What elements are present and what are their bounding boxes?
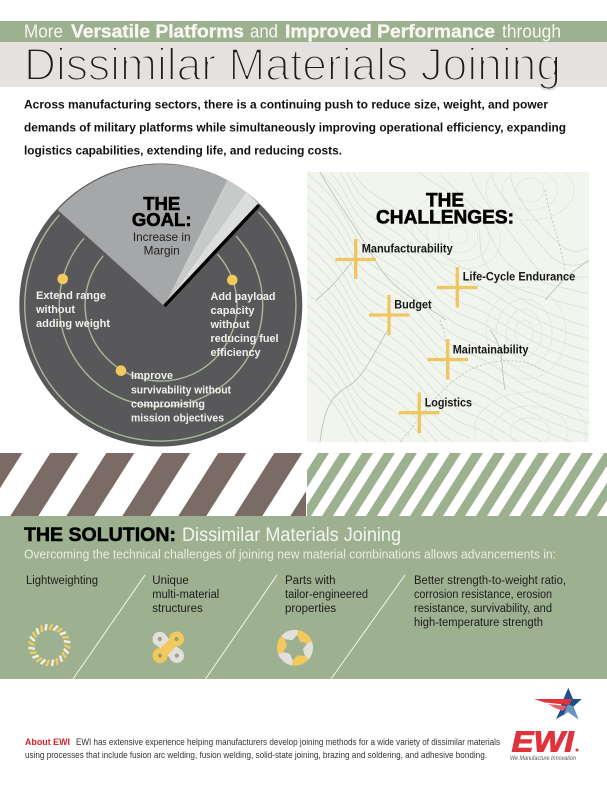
heading: kicker line: More — [24, 20, 63, 42]
solution heading: THE SOLUTION: — [24, 525, 176, 546]
icon: circular arrows — [277, 630, 313, 666]
goal heading: THE — [143, 193, 180, 214]
label: add payload: efficiency — [210, 347, 261, 359]
challenges heading — [376, 191, 514, 228]
rings — [25, 212, 296, 441]
logo: EWI — [510, 688, 582, 762]
about EWI text: using processes that include fusion arc welding, fusion welding, solid-state joining, brazing and soldering, and adhesive bonding. — [25, 750, 487, 760]
column: better strength: high-temperature strength — [414, 617, 543, 629]
label: add payload: reducing fuel — [210, 333, 278, 345]
topographic contours — [307, 172, 589, 442]
trails on map — [316, 172, 589, 442]
label: improve survivability: mission objectives — [131, 412, 224, 424]
diagonal separators — [73, 575, 405, 679]
intro paragraph: demands of military platforms while simultaneously improving operational efficiency, expanding — [24, 120, 566, 134]
challenge labels: Logistics — [425, 397, 472, 409]
green stripes — [307, 453, 607, 516]
column: multi-material structures: Unique — [152, 575, 189, 587]
challenge labels — [362, 244, 575, 409]
label: add payload: capacity — [210, 305, 255, 317]
goal heading: Increase in — [133, 230, 191, 244]
divider line — [164, 205, 259, 306]
label: add payload: without — [210, 319, 250, 331]
about EWI text — [25, 737, 500, 760]
column: better strength — [414, 575, 566, 629]
intro paragraph — [24, 98, 566, 158]
panel: the solution — [0, 516, 607, 679]
pie wedge: margin — [58, 164, 227, 306]
label: add payload: Add payload — [210, 291, 276, 303]
panel: the goal pie chart — [19, 164, 302, 446]
challenge labels: Manufacturability — [362, 244, 453, 256]
contour peaks — [412, 172, 586, 442]
label: extend range: Extend range — [36, 290, 106, 302]
column: better strength: corrosion resistance, erosion — [414, 589, 552, 601]
label: extend range: adding weight — [36, 318, 110, 330]
panel: the challenges topographic map — [307, 172, 589, 442]
brown stripes — [0, 453, 306, 516]
label: improve survivability: survivability without — [131, 384, 231, 396]
challenge labels: Budget — [394, 300, 432, 312]
dots — [57, 274, 238, 376]
goal heading: Margin — [144, 244, 180, 258]
column: lightweighting: Lightweighting — [26, 575, 98, 587]
label: extend range — [35, 290, 110, 330]
heading: kicker line: through — [502, 20, 561, 42]
column: tailor-engineered properties — [285, 575, 368, 615]
challenges heading: THE — [426, 191, 464, 212]
goal heading: GOAL: — [132, 209, 192, 230]
column: better strength: resistance, survivability, and — [414, 603, 552, 615]
icon: chain links — [152, 632, 184, 663]
label: add payload — [210, 291, 278, 359]
challenge labels: Maintainability — [453, 344, 529, 356]
column: multi-material structures: structures — [152, 603, 203, 615]
heading: kicker line — [24, 20, 561, 42]
column: tailor-engineered properties: Parts with — [285, 575, 336, 587]
column: multi-material structures — [152, 575, 219, 615]
column: multi-material structures: multi-material — [152, 589, 219, 601]
column: tailor-engineered properties: tailor-engineered — [285, 589, 368, 601]
pie wedge: light slice — [164, 180, 246, 306]
about EWI text: EWI has extensive experience helping manufacturers develop joining methods for a wide variety of dissimilar materials — [76, 737, 500, 747]
label: improve survivability — [131, 370, 231, 424]
heading: kicker line: Improved Performance — [285, 20, 495, 42]
label: improve survivability: Improve — [131, 370, 173, 382]
challenges heading: CHALLENGES: — [376, 207, 514, 228]
markers and labels — [336, 239, 478, 433]
column: tailor-engineered properties: properties — [285, 603, 336, 615]
icon: twisted ring — [28, 624, 70, 666]
intro paragraph: Across manufacturing sectors, there is a continuing push to reduce size, weight, and power — [24, 98, 548, 112]
label: extend range: without — [35, 304, 75, 316]
column: better strength: Better strength-to-weight ratio, — [414, 575, 566, 587]
header band — [0, 20, 607, 42]
solution heading: Dissimilar Materials Joining — [182, 525, 401, 546]
challenge labels: Life-Cycle Endurance — [463, 272, 575, 284]
logo star — [534, 688, 582, 719]
heading: kicker line: Versatile Platforms — [71, 20, 244, 42]
label: improve survivability: compromising — [131, 398, 205, 410]
logo wordmark: EWI — [512, 727, 575, 759]
heading: kicker line: and — [250, 20, 278, 42]
intro paragraph: logistics capabilities, extending life, and reducing costs. — [24, 144, 342, 158]
solution subheading: Overcoming the technical challenges of joining new material combinations allows advancements in: — [24, 547, 556, 561]
goal heading — [132, 193, 192, 258]
solution heading — [24, 525, 401, 546]
pie wedge: lighter slice — [164, 192, 259, 306]
about EWI text: About EWI — [25, 737, 70, 747]
logo tagline: We Manufacture Innovation — [510, 756, 577, 762]
title band — [0, 39, 607, 90]
title: Dissimilar Materials Joining — [24, 39, 561, 90]
